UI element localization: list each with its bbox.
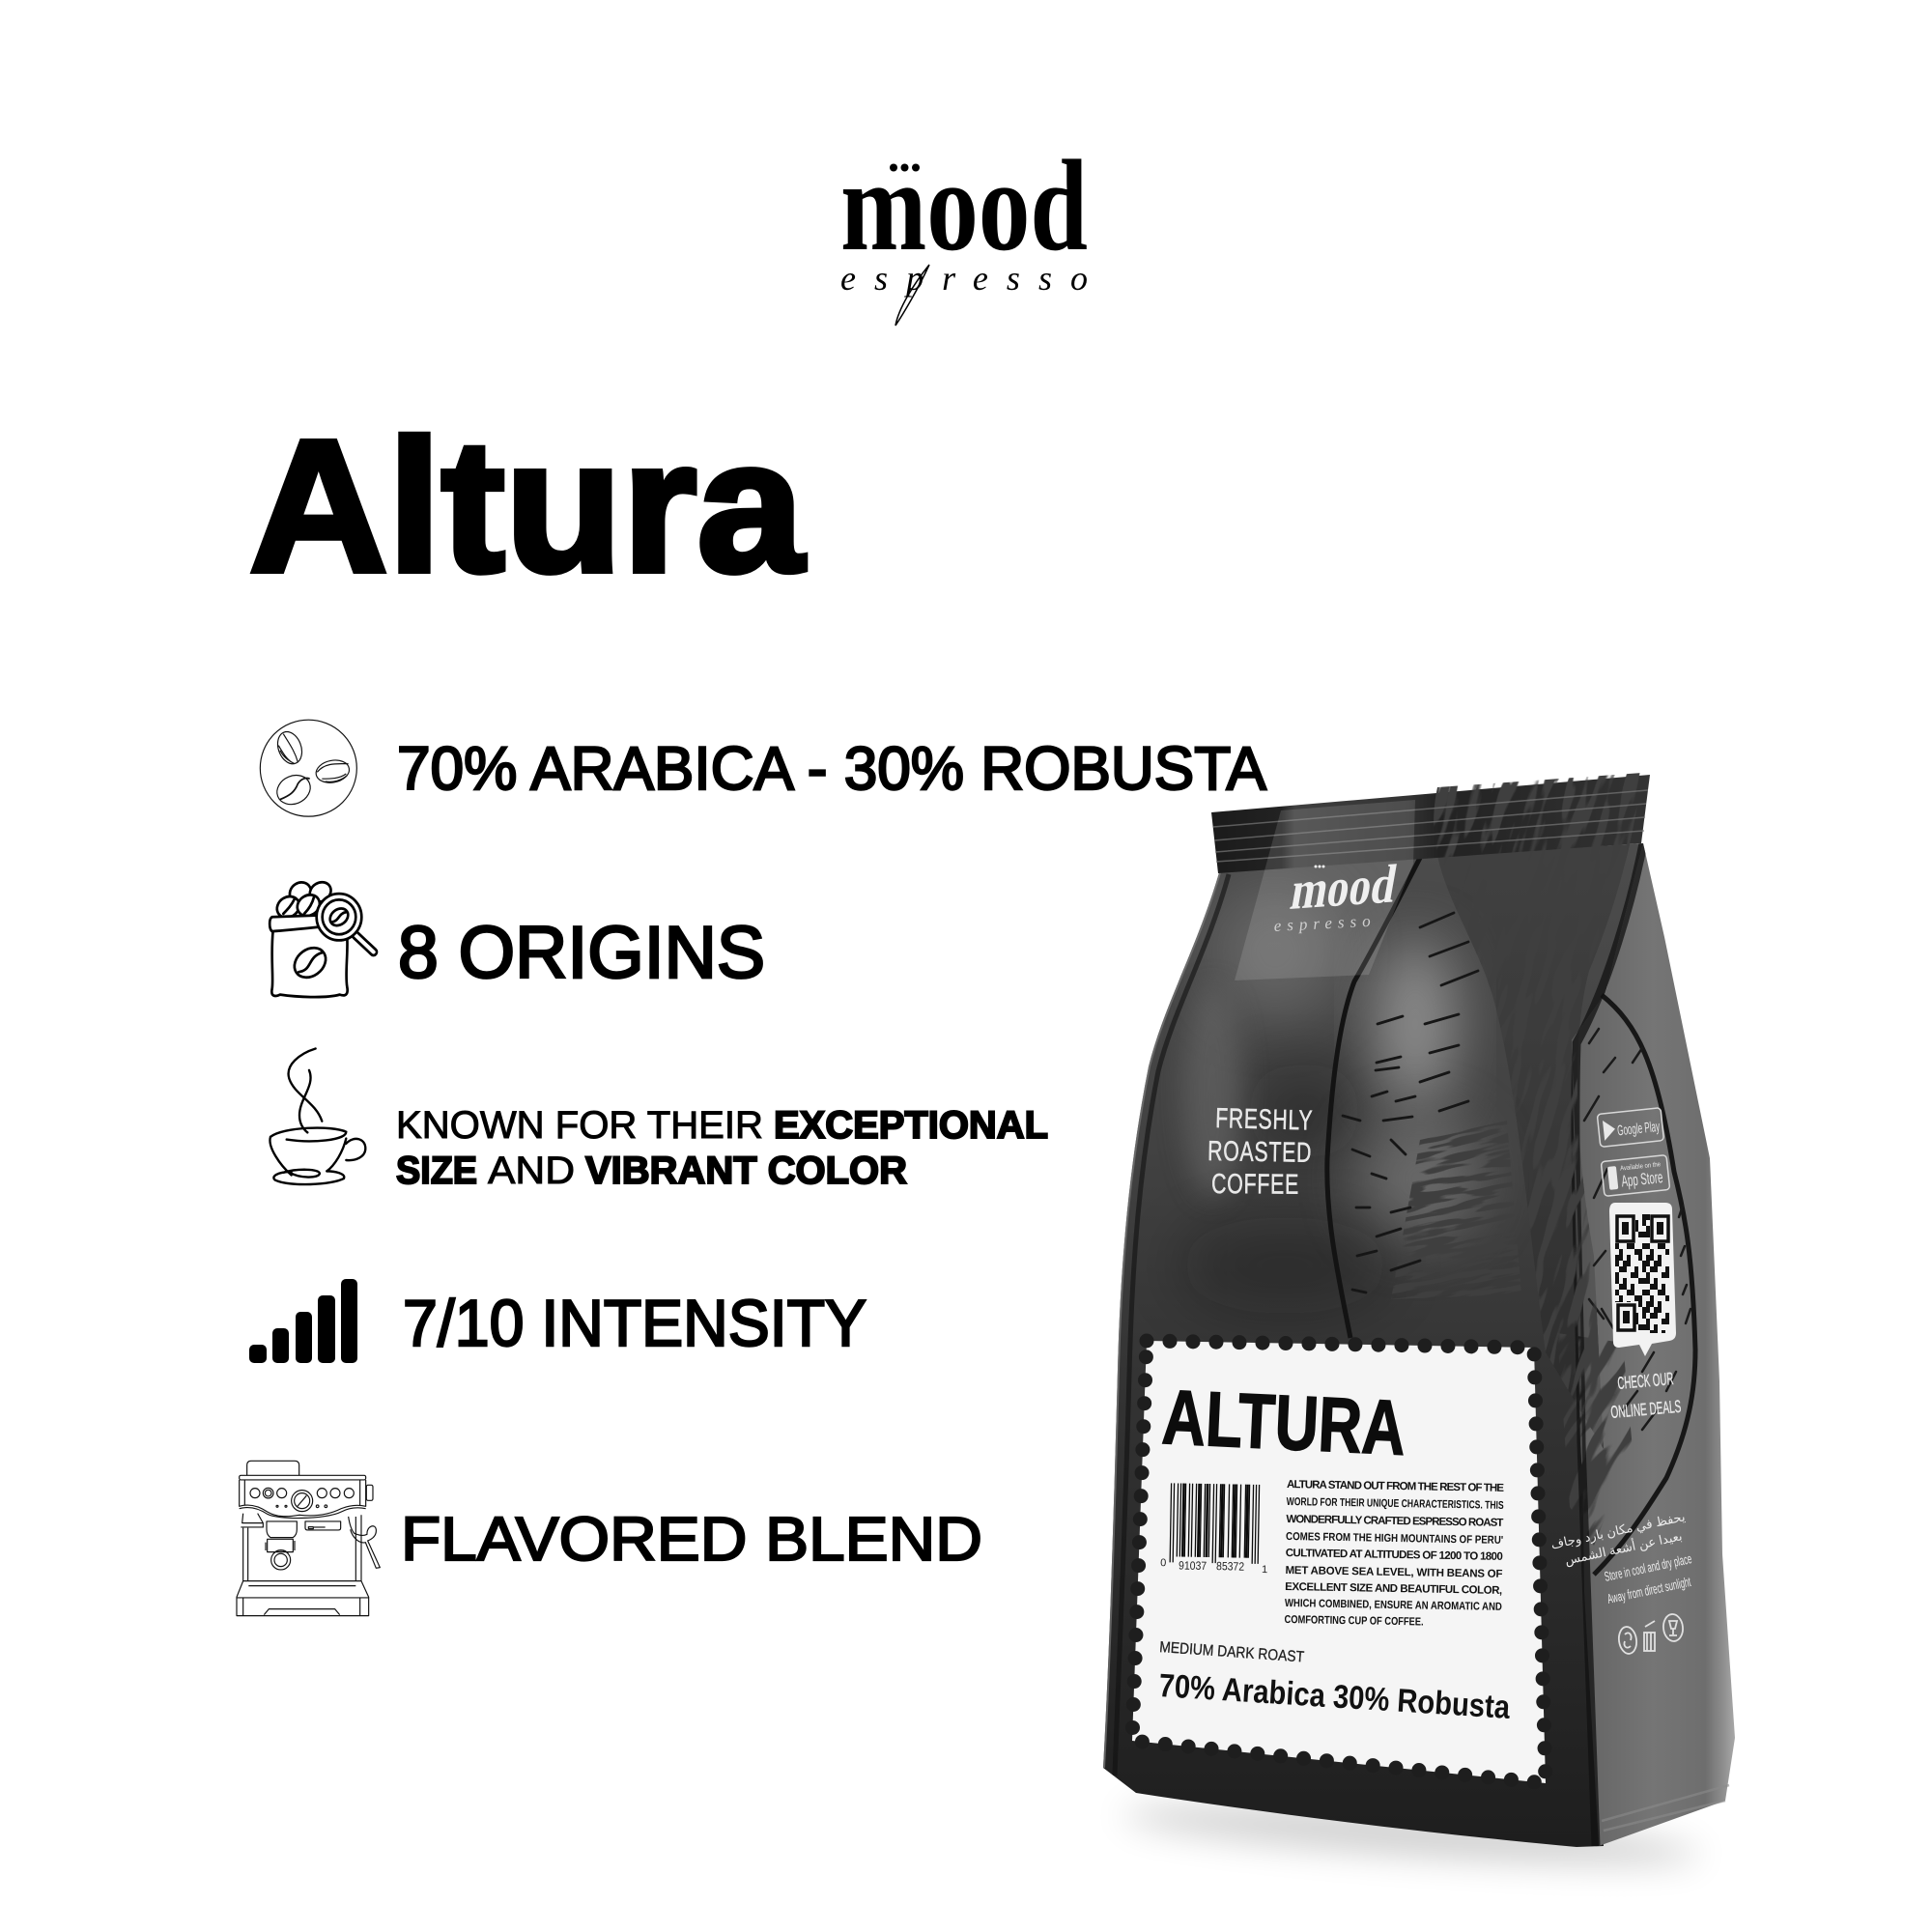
side panel storage text: يحفظ في مكان بارد وجاف xyxy=(1549,1509,1687,1552)
icon: espresso machine xyxy=(237,1461,380,1616)
bean outline xyxy=(1324,859,1422,1339)
bag front panel xyxy=(1103,843,1643,1847)
label description: WORLD FOR THEIR UNIQUE CHARACTERISTICS. THIS xyxy=(1287,1496,1504,1512)
label background with perforated edge xyxy=(1132,1341,1546,1783)
product: coffee bag xyxy=(1103,773,1735,1878)
badge: app store xyxy=(1601,1155,1670,1196)
side panel texture xyxy=(1559,1333,1633,1546)
badge: google play: Google Play xyxy=(1616,1119,1661,1139)
side bean outline xyxy=(1594,995,1695,1575)
front-side fold xyxy=(1576,843,1643,1846)
barcode: 91037 xyxy=(1179,1558,1208,1573)
bag label xyxy=(1132,1341,1546,1783)
label description: EXCELLENT SIZE AND BEAUTIFUL COLOR, xyxy=(1285,1581,1502,1597)
bag logo panel xyxy=(1235,800,1415,980)
bag tagline: ROASTED xyxy=(1208,1136,1312,1169)
feature row: flavored blend xyxy=(237,1461,982,1616)
bag tagline: FRESHLY xyxy=(1215,1103,1314,1137)
side panel storage text xyxy=(1549,1509,1693,1606)
bean hatch strokes xyxy=(1343,913,1478,1293)
side panel store badges xyxy=(1597,1108,1670,1196)
icon: intensity bars xyxy=(249,1279,357,1363)
bag logo: espresso xyxy=(1273,912,1371,935)
text: description: SIZE xyxy=(396,1150,477,1192)
badge: app store: Available on the xyxy=(1620,1161,1661,1173)
label description: MET ABOVE SEA LEVEL, WITH BEANS OF xyxy=(1285,1565,1503,1580)
label description: CULTIVATED AT ALTITUDES OF 1200 TO 1800 xyxy=(1286,1548,1503,1563)
text: description: AND xyxy=(488,1150,575,1192)
icon: sack with magnifier xyxy=(270,878,374,997)
side panel deals text: CHECK OUR xyxy=(1617,1369,1674,1393)
feature row: origins xyxy=(270,878,765,997)
feature row: blend xyxy=(260,720,1266,816)
feature row: description xyxy=(270,1048,1048,1192)
barcode xyxy=(1160,1483,1269,1576)
label description: WONDERFULLY CRAFTED ESPRESSO ROAST xyxy=(1286,1514,1503,1529)
text: flavored blend: FLAVORED BLEND xyxy=(401,1504,982,1574)
side panel deals text xyxy=(1610,1369,1682,1422)
bag tagline: COFFEE xyxy=(1211,1169,1299,1201)
icon: coffee beans xyxy=(260,720,356,816)
bag tagline xyxy=(1208,1103,1314,1201)
side panel storage text: Away from direct sunlight xyxy=(1605,1574,1692,1606)
label name: ALTURA xyxy=(1160,1374,1407,1471)
text: intensity: 7/10 INTENSITY xyxy=(403,1287,867,1360)
barcode: 0 xyxy=(1160,1557,1166,1569)
barcode: 85372 xyxy=(1216,1559,1245,1574)
side panel recycling icons xyxy=(1617,1613,1684,1655)
side panel deals text: ONLINE DEALS xyxy=(1610,1397,1682,1422)
text: description: EXCEPTIONAL xyxy=(774,1104,1048,1147)
bag side panel xyxy=(1572,843,1735,1846)
label roast: MEDIUM DARK ROAST xyxy=(1159,1639,1305,1665)
text: description xyxy=(396,1104,1048,1192)
bag logo: mood xyxy=(1287,853,1402,922)
logo: mood espresso xyxy=(840,134,1088,326)
barcode: 1 xyxy=(1262,1564,1267,1576)
label blend: 70% Arabica 30% Robusta xyxy=(1157,1667,1512,1726)
bag ground shadow xyxy=(1121,1795,1702,1874)
bag logo xyxy=(1273,853,1402,935)
text: origins: 8 ORIGINS xyxy=(398,912,765,994)
badge: app store: App Store xyxy=(1621,1168,1663,1190)
side panel qr code xyxy=(1609,1203,1676,1356)
label description: COMES FROM THE HIGH MOUNTAINS OF PERU' xyxy=(1286,1531,1503,1547)
bag top seal xyxy=(1140,773,1684,1781)
label description: WHICH COMBINED, ENSURE AN AROMATIC AND xyxy=(1285,1598,1502,1613)
logo: mood espresso: espresso xyxy=(840,259,1088,298)
bag bottom gusset xyxy=(1602,1785,1729,1831)
bean crease texture xyxy=(1437,844,1627,1449)
side panel storage text: بعيدا عن أشعة الشمس xyxy=(1563,1527,1684,1569)
title: Altura xyxy=(249,401,806,611)
feature row: intensity xyxy=(249,1279,867,1363)
text: description: KNOWN FOR THEIR xyxy=(396,1104,763,1147)
label description: COMFORTING CUP OF COFFEE. xyxy=(1285,1614,1424,1628)
label description xyxy=(1285,1479,1504,1630)
side panel storage text: Store in cool and dry place xyxy=(1603,1550,1693,1584)
text: description: VIBRANT COLOR xyxy=(585,1150,907,1192)
icon: steaming cup xyxy=(270,1048,365,1184)
bean hatch texture xyxy=(1393,1124,1504,1298)
text: blend: 70% ARABICA - 30% ROBUSTA xyxy=(397,735,1266,803)
side panel hatch strokes xyxy=(1584,1029,1690,1430)
bag shading xyxy=(1103,775,1698,1846)
logo: mood espresso: mood xyxy=(840,134,1088,278)
label description: ALTURA STAND OUT FROM THE REST OF THE xyxy=(1287,1479,1504,1494)
